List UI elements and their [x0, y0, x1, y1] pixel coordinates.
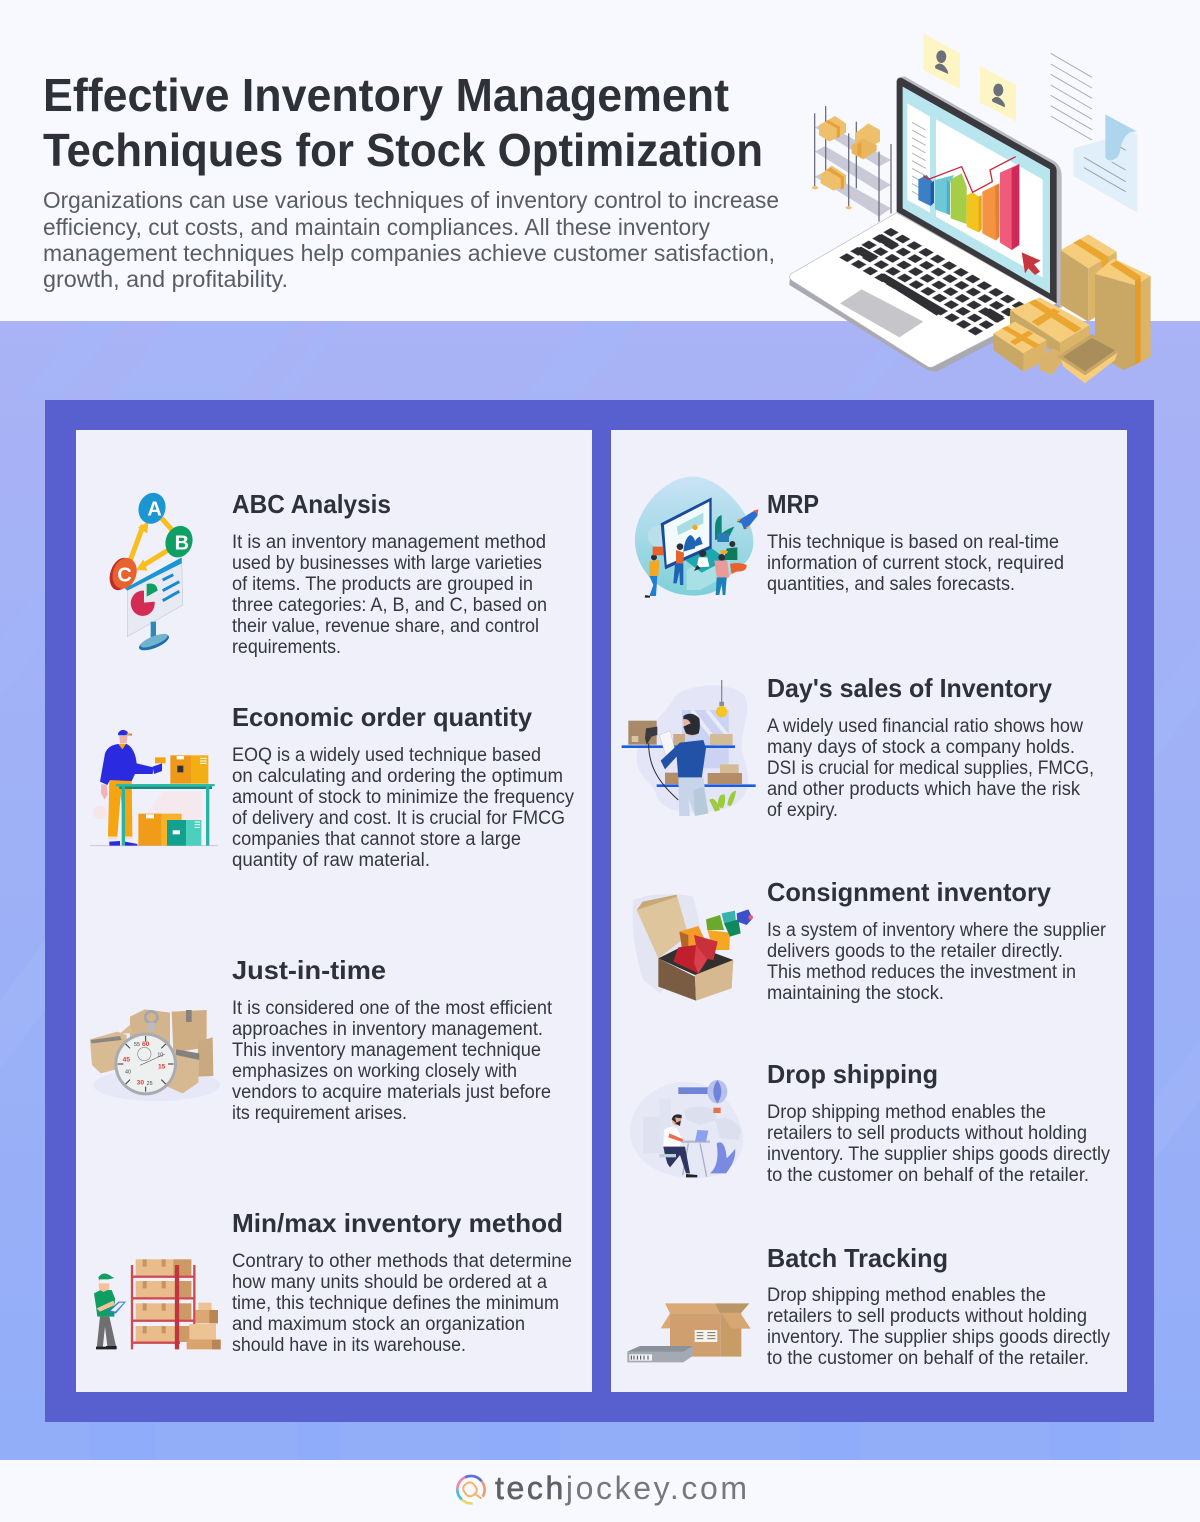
- body text: This method reduces the investment in: [767, 962, 1076, 983]
- icon: stopwatch and boxes: 15: [158, 1064, 166, 1071]
- body text: and other products which have the risk: [767, 779, 1080, 800]
- section: Just-in-time: [90, 955, 553, 1124]
- icon: ABC triangle and board: [106, 489, 197, 654]
- body text: to the customer on behalf of the retailer.: [767, 1348, 1089, 1369]
- body text: of delivery and cost. It is crucial for FMCG: [232, 808, 565, 829]
- body text: and maximum stock an organization: [232, 1314, 525, 1335]
- hero illustration: laptop with stock chart and boxes: [789, 33, 1151, 383]
- panel: right column: [611, 430, 1127, 1392]
- icon: sticky notes: [923, 33, 1016, 122]
- body text: inventory. The supplier ships goods directly: [767, 1144, 1110, 1165]
- body text: EOQ is a widely used technique based: [232, 745, 541, 766]
- body text: It is an inventory management method: [232, 532, 546, 553]
- intro paragraph: efficiency, cut costs, and maintain compliances. All these inventory: [43, 214, 710, 240]
- body text: amount of stock to minimize the frequency: [232, 787, 574, 808]
- panel: left column: [76, 430, 592, 1392]
- body text: [232, 532, 547, 658]
- section: Day's sales of Inventory: [622, 673, 1094, 821]
- body text: A widely used financial ratio shows how: [767, 716, 1083, 737]
- heading: Consignment inventory: [767, 877, 1052, 907]
- icon: techjockey ring logo: [457, 1476, 485, 1503]
- body text: maintaining the stock.: [767, 983, 944, 1004]
- body text: This technique is based on real-time: [767, 532, 1059, 553]
- heading: Batch Tracking: [767, 1243, 948, 1273]
- body text: on calculating and ordering the optimum: [232, 766, 563, 787]
- title: Techniques for Stock Optimization: [43, 124, 763, 176]
- body text: its requirement arises.: [232, 1103, 407, 1124]
- body text: quantity of raw material.: [232, 850, 430, 871]
- body text: of expiry.: [767, 800, 838, 821]
- body text: approaches in inventory management.: [232, 1019, 543, 1040]
- heading: MRP: [767, 489, 819, 519]
- body text: information of current stock, required: [767, 553, 1064, 574]
- intro paragraph: [43, 187, 779, 292]
- icon: stopwatch and boxes: [90, 1009, 220, 1101]
- icon: stopwatch and boxes: 45: [123, 1057, 130, 1064]
- body text: Drop shipping method enables the: [767, 1102, 1046, 1123]
- frame panel: [45, 400, 1154, 1422]
- section: Drop shipping: [630, 1059, 1110, 1186]
- heading: Just-in-time: [232, 955, 386, 985]
- heading: Economic order quantity: [232, 702, 533, 732]
- icon: worker scanning boxes at table: [90, 730, 218, 846]
- section: Min/max inventory method: [94, 1208, 572, 1356]
- icon: laptop: [789, 77, 1062, 372]
- heading: Day's sales of Inventory: [767, 673, 1053, 703]
- body text: should have in its warehouse.: [232, 1335, 466, 1356]
- icon: ABC triangle and board: C: [117, 564, 132, 586]
- body text: This inventory management technique: [232, 1040, 541, 1061]
- body text: [767, 920, 1107, 1004]
- section: MRP: [635, 477, 1064, 598]
- body text: time, this technique defines the minimum: [232, 1293, 559, 1314]
- body text: [767, 1285, 1110, 1369]
- title: [43, 69, 763, 176]
- icon: red cursor arrow: [1022, 252, 1041, 275]
- icon: worker with warehouse rack: [94, 1259, 221, 1349]
- body text: companies that cannot store a large: [232, 829, 521, 850]
- icon: stopwatch and boxes: 10: [157, 1053, 163, 1059]
- body text: [767, 716, 1094, 821]
- footer logo and wordmark: [457, 1470, 747, 1506]
- bar chart on laptop screen: [918, 157, 1019, 250]
- body text: used by businesses with large varieties: [232, 553, 542, 574]
- icon: ABC triangle and board: A: [147, 498, 162, 520]
- body text: [767, 1102, 1110, 1186]
- body text: vendors to acquire materials just before: [232, 1082, 551, 1103]
- panel background: [611, 430, 1127, 1392]
- body text: [232, 998, 553, 1124]
- body text: DSI is crucial for medical supplies, FMCG,: [767, 758, 1094, 779]
- icon: stopwatch and boxes: 55: [134, 1042, 140, 1048]
- body text: quantities, and sales forecasts.: [767, 574, 1015, 595]
- intro paragraph: management techniques help companies achieve customer satisfaction,: [43, 240, 775, 266]
- section: Economic order quantity: [90, 702, 574, 871]
- icon: cardboard box and barcode device: [627, 1303, 751, 1362]
- body text: Is a system of inventory where the supplier: [767, 920, 1107, 941]
- body text: [767, 532, 1064, 595]
- icon: stopwatch and boxes: 30: [137, 1080, 144, 1087]
- heading: Min/max inventory method: [232, 1208, 563, 1238]
- section: Batch Tracking: [627, 1243, 1110, 1369]
- icon: stopwatch and boxes: 25: [147, 1081, 153, 1087]
- body text: retailers to sell products without holding: [767, 1123, 1087, 1144]
- body text: emphasizes on working closely with: [232, 1061, 517, 1082]
- icon: stacked cardboard boxes: [993, 234, 1151, 383]
- heading: ABC Analysis: [232, 489, 391, 519]
- body text: Drop shipping method enables the: [767, 1285, 1046, 1306]
- body text: how many units should be ordered at a: [232, 1272, 547, 1293]
- icon: storage shelf with boxes: [812, 106, 891, 222]
- intro paragraph: Organizations can use various techniques of inventory control to increase: [43, 187, 779, 213]
- body text: of items. The products are grouped in: [232, 574, 533, 595]
- icon: stopwatch and boxes: 40: [125, 1069, 131, 1075]
- icon: curled document: [1073, 114, 1137, 213]
- body text: retailers to sell products without holding: [767, 1306, 1087, 1327]
- icon: open box with coloured cubes: [633, 894, 753, 1001]
- heading: Drop shipping: [767, 1059, 938, 1089]
- panel background: [76, 430, 592, 1392]
- patterned blue band: [0, 321, 1200, 1460]
- icon: team around monitor: [635, 477, 758, 598]
- title: Effective Inventory Management: [43, 69, 729, 121]
- body text: requirements.: [232, 637, 341, 658]
- body text: [232, 745, 574, 871]
- icon: man working at laptop with world map: [630, 1080, 743, 1178]
- body text: inventory. The supplier ships goods directly: [767, 1327, 1110, 1348]
- icon: man scanning shelf stock: [622, 680, 756, 816]
- body text: their value, revenue share, and control: [232, 616, 539, 637]
- body text: It is considered one of the most efficient: [232, 998, 553, 1019]
- body text: Contrary to other methods that determine: [232, 1251, 572, 1272]
- body text: three categories: A, B, and C, based on: [232, 595, 547, 616]
- body text: [232, 1251, 572, 1356]
- icon: stopwatch and boxes: 60: [142, 1041, 150, 1048]
- section: ABC Analysis: [106, 489, 547, 658]
- icon: ABC triangle and board: B: [175, 532, 189, 554]
- icon: document lines: [1051, 53, 1092, 140]
- body text: delivers goods to the retailer directly.: [767, 941, 1063, 962]
- section: Consignment inventory: [633, 877, 1107, 1004]
- body text: to the customer on behalf of the retailer.: [767, 1165, 1089, 1186]
- body text: many days of stock a company holds.: [767, 737, 1075, 758]
- intro paragraph: growth, and profitability.: [43, 266, 288, 292]
- wordmark: techjockey.com: [495, 1470, 747, 1506]
